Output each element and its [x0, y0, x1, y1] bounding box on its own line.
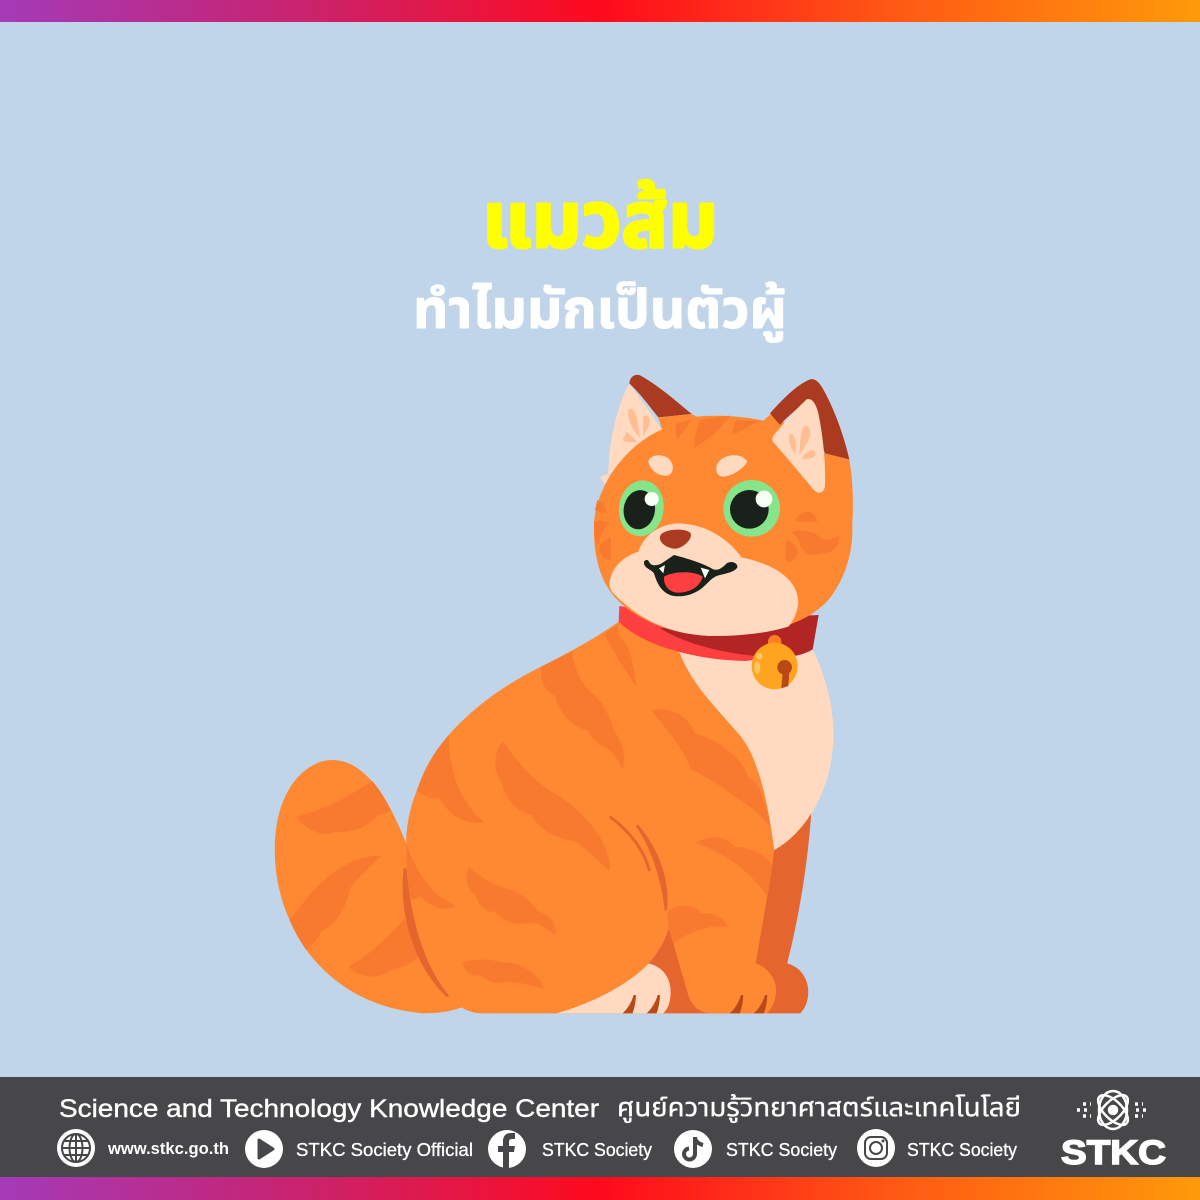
- top gradient bar: [0, 0, 1200, 22]
- website label: www.stkc.go.th: [107, 1139, 229, 1158]
- bell: [752, 635, 798, 689]
- illustration: orange cat: [275, 375, 853, 1013]
- organisation name english: Science and Technology Knowledge Center: [59, 1095, 599, 1123]
- cat head with collar and bell: [594, 375, 853, 689]
- head: [594, 413, 853, 636]
- organisation name thai: ศูนย์ความรู้วิทยาศาสตร์และเทคโนโลยี: [617, 1092, 1021, 1123]
- icon: tiktok: [674, 1130, 712, 1168]
- facebook label: STKC Society: [542, 1140, 652, 1160]
- youtube label: STKC Society Official: [296, 1140, 473, 1160]
- footer band: [0, 1077, 1200, 1200]
- mouth: [644, 555, 737, 596]
- instagram label: STKC Society: [907, 1140, 1017, 1160]
- cat body: [275, 622, 833, 1013]
- tiktok label: STKC Society: [726, 1140, 837, 1160]
- left eye: [615, 477, 667, 539]
- logo: STKC atom mark: [1077, 1090, 1149, 1130]
- bottom gradient bar: [0, 1177, 1200, 1200]
- right ear: [770, 379, 849, 493]
- brows: [648, 455, 673, 476]
- nose: [660, 530, 691, 549]
- title: แมวส้ม: [482, 176, 718, 264]
- icon: instagram: [857, 1129, 895, 1167]
- subtitle: ทำไมมักเป็นตัวผู้: [413, 280, 787, 342]
- left ear: [600, 375, 692, 483]
- muzzle: [609, 523, 798, 636]
- icon: facebook: [488, 1130, 526, 1168]
- icon: globe: [57, 1129, 95, 1167]
- collar: [619, 606, 819, 661]
- right eye: [723, 480, 780, 537]
- icon: play: [245, 1130, 283, 1168]
- logo: STKC wordmark: STKC: [1061, 1134, 1166, 1172]
- forehead and cheek stripes: [594, 416, 840, 562]
